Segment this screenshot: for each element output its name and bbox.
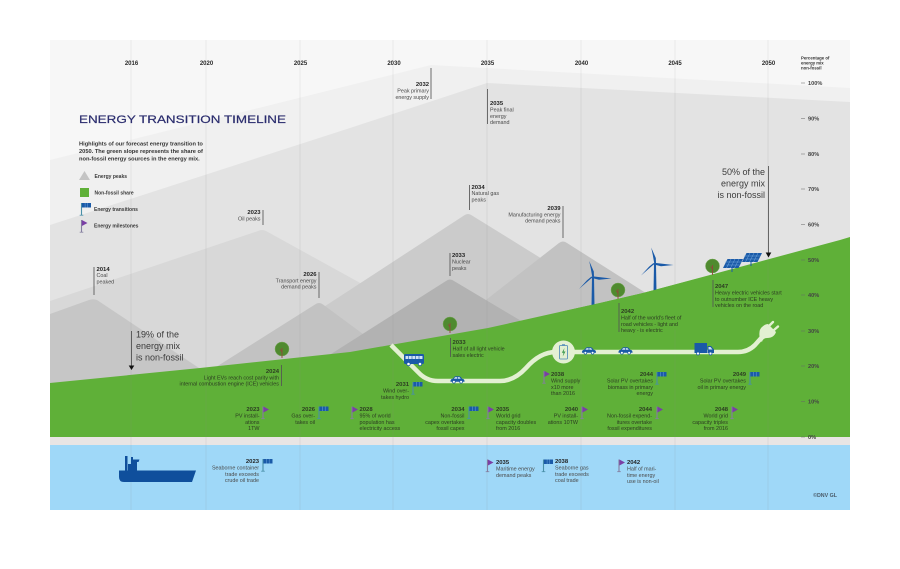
transition: 2034 capex: capex overtakes — [425, 420, 465, 426]
peak label: 2034 gas: Natural gas — [472, 191, 499, 197]
transition: 2049 solar oil: 2049 — [733, 372, 747, 378]
transition: 2026 gas: 2026 — [302, 407, 316, 413]
maritime: 2023 container trade: trade exceeds — [225, 472, 259, 478]
chart background panel — [50, 40, 850, 510]
tree: 2033 — [443, 317, 457, 333]
milestone: 2038 wind supply: 2038 — [551, 372, 565, 378]
milestone: 2038 wind supply: x10 more — [551, 385, 573, 391]
milestone: 2040 PV: PV install- — [554, 414, 578, 420]
year axis labels: 2040 — [575, 61, 589, 67]
peak label: 2039 manufacturing — [508, 206, 563, 238]
year axis labels: 2050 — [762, 61, 776, 67]
peak label: 2026 transport: Transport energy — [276, 278, 317, 284]
peak label: 2032 primary supply: 2032 — [416, 82, 430, 88]
maritime: 2038 gas trade: Seaborne gas — [555, 466, 589, 472]
maritime: 2023 container trade: crude oil trade — [225, 478, 259, 484]
maritime: 2023 container trade — [212, 459, 272, 484]
milestone: 2035 grid: 2035 — [496, 407, 510, 413]
peak label: 2032 primary supply: Peak primary — [397, 88, 429, 94]
icon: bus — [404, 354, 424, 366]
peak label: 2035 final demand: demand — [490, 120, 509, 126]
milestone: 2044 expenditures: fossil expenditures — [607, 426, 652, 432]
milestone: 2028 electricity — [350, 406, 401, 432]
percentage axis: 70% — [808, 187, 819, 193]
transition: 2034 capex — [425, 406, 478, 432]
milestone: 2048 grid: 2048 — [715, 407, 729, 413]
milestone: 2048 grid: capacity triples — [692, 420, 728, 426]
natural gas peak mountain — [230, 214, 660, 400]
percentage axis: non-fossil — [801, 66, 822, 70]
maritime: 2035 demand peaks: 2035 — [496, 460, 510, 466]
maritime: 2023 container trade: Seaborne container — [212, 466, 259, 472]
tree: 2042 — [611, 283, 625, 299]
callout: 50 percent: energy mix — [721, 178, 766, 188]
label: 2024 EV cost parity — [180, 365, 282, 388]
peak label: 2033 nuclear — [450, 253, 471, 276]
transition: 2031 wind: takes hydro — [381, 395, 409, 401]
peak label: 2039 manufacturing: Manufacturing energy — [508, 212, 561, 218]
milestone: 2040 PV — [548, 406, 588, 426]
copyright: ©DNV GL — [813, 492, 838, 499]
year axis labels — [125, 61, 776, 67]
peak label: 2035 final demand: 2035 — [490, 101, 504, 107]
peak label: 2023 oil: Oil peaks — [238, 216, 261, 222]
icon: car 1 — [450, 376, 464, 383]
percentage axis: 100% — [808, 81, 822, 87]
year axis labels: 2030 — [387, 61, 401, 67]
transition: 2049 solar oil: Solar PV overtakes — [700, 378, 746, 384]
transition: 2026 gas — [291, 406, 328, 426]
maritime: 2042 non-oil — [617, 460, 659, 485]
transition: 2044 solar biomass: energy — [637, 391, 653, 397]
intro text: 2050. The green slope represents the share of — [79, 149, 203, 155]
transition: 2044 solar biomass: biomass in primary — [608, 385, 653, 391]
transition: 2044 solar biomass: Solar PV overtakes — [607, 378, 653, 384]
maritime: 2038 gas trade — [542, 459, 589, 484]
maritime band — [50, 445, 850, 510]
oil peak mountain — [50, 230, 420, 400]
peak label: 2023 oil — [238, 210, 263, 225]
label: 2033 half of light vehicles: sales electric — [452, 353, 484, 359]
milestone: 2023 PV: 1TW — [248, 426, 260, 432]
electric road — [391, 336, 763, 381]
icon: wind turbine 1 — [579, 261, 612, 318]
transition: 2034 capex: fossil capex — [436, 426, 465, 432]
maritime: 2035 demand peaks: Maritime energy — [496, 466, 535, 472]
icon: solar panel 1 — [723, 259, 743, 272]
label: 2047 heavy vehicles — [713, 280, 782, 309]
peak label: 2034 gas: 2034 — [472, 185, 485, 191]
milestone: 2023 PV: ations — [245, 420, 260, 426]
percentage axis: 30% — [808, 329, 819, 335]
non-fossil slope overlay hiding turbine bases — [560, 278, 700, 330]
icon: truck — [694, 343, 714, 355]
peak label: 2014 coal — [94, 267, 114, 295]
transition: 2031 wind: Wind over- — [383, 388, 409, 394]
label: 2042 road vehicles: Half of the world's fleet of — [621, 316, 682, 322]
milestone: 2048 grid: World grid — [704, 414, 728, 420]
transport peak mountain — [205, 303, 420, 400]
intro text: Highlights of our forecast energy transition to — [79, 142, 203, 148]
peak label: 2026 transport: 2026 — [303, 272, 317, 278]
callout: 50 percent: is non-fossil — [717, 190, 765, 200]
label: 2042 road vehicles: road vehicles - light and — [621, 322, 678, 328]
peak label: 2033 nuclear: Nuclear — [452, 260, 471, 266]
separator band — [50, 437, 850, 445]
milestone: 2038 wind supply — [542, 371, 581, 397]
maritime: 2038 gas trade: trade exceeds — [555, 472, 589, 478]
label: 2042 road vehicles — [619, 303, 682, 334]
legend: energy peaks: Energy peaks — [94, 174, 127, 180]
label: 2047 heavy vehicles: to outnumber ICE heavy — [715, 297, 773, 303]
peak label: 2039 manufacturing: demand peaks — [525, 219, 561, 225]
milestone: 2023 PV: 2023 — [246, 407, 260, 413]
coal peak mountain — [50, 299, 205, 400]
manufacturing peak mountain — [450, 242, 660, 360]
tree: 2047 — [706, 259, 720, 275]
label: 2024 EV cost parity: internal combustion engine (ICE) vehicles — [180, 382, 279, 388]
milestone: 2023 PV: PV install- — [235, 414, 260, 420]
peak label: 2023 oil: 2023 — [247, 210, 261, 216]
maritime: 2042 non-oil: use is non-oil — [627, 479, 659, 485]
legend: non-fossil share: Non-fossil share — [94, 190, 134, 196]
milestone: 2028 electricity: electricity access — [360, 426, 401, 432]
percentage axis: 80% — [808, 152, 819, 158]
maritime: 2042 non-oil: 2042 — [627, 460, 641, 466]
callout: 19 percent: energy mix — [136, 341, 181, 351]
percentage axis: 10% — [808, 400, 819, 406]
legend: energy milestones: Energy milestones — [94, 224, 139, 230]
milestone: 2044 expenditures: itures overtake — [617, 420, 652, 426]
transition: 2044 solar biomass — [607, 372, 666, 397]
peak label: 2035 final demand: Peak final — [490, 108, 514, 114]
callout: 50 percent — [717, 166, 771, 258]
milestone: 2028 electricity: 2028 — [360, 407, 373, 413]
transition: 2049 solar oil: oil in primary energy — [697, 385, 746, 391]
milestone: 2044 expenditures: 2044 — [639, 407, 653, 413]
milestone: 2048 grid — [692, 406, 738, 432]
milestone: 2035 grid: World grid — [496, 414, 520, 420]
maritime: 2042 non-oil: time energy — [627, 473, 655, 479]
peak label: 2033 nuclear: peaks — [452, 266, 467, 272]
milestone: 2035 grid — [486, 406, 536, 432]
icon: wind turbine 2 — [641, 248, 674, 304]
percentage axis: 20% — [808, 364, 819, 370]
transition: 2026 gas: takes oil — [295, 420, 315, 426]
milestone: 2044 expenditures: Non-fossil expend- — [607, 414, 652, 420]
legend: energy transitions: Energy transitions — [94, 207, 138, 213]
peak label: 2035 final demand: energy — [490, 114, 507, 120]
year axis labels: 2035 — [481, 61, 495, 67]
mountains: energy peaks — [50, 65, 850, 437]
percentage axis: 0% — [808, 435, 816, 441]
peak label: 2026 transport: demand peaks — [281, 285, 317, 291]
transition: 2031 wind — [381, 382, 422, 401]
peak label: 2014 coal: 2014 — [96, 267, 110, 273]
percentage axis: Percentage of — [801, 56, 830, 60]
peak label: 2034 gas — [470, 185, 499, 210]
intro text: non-fossil energy sources in the energy mix. — [79, 156, 200, 162]
nuclear peak mountain — [320, 280, 560, 380]
maritime: 2042 non-oil: Half of mari- — [627, 466, 657, 472]
peak label: 2039 manufacturing: 2039 — [547, 206, 561, 212]
callout: 50 percent: 50% of the — [722, 167, 765, 177]
title: ENERGY TRANSITION TIMELINE — [79, 114, 286, 126]
icon: car 2 — [582, 347, 596, 354]
year axis labels: 2025 — [294, 61, 308, 67]
peak label: 2014 coal: peaked — [96, 279, 114, 285]
transition: 2031 wind: 2031 — [396, 382, 410, 388]
transition: 2044 solar biomass: 2044 — [640, 372, 654, 378]
maritime: 2023 container trade: 2023 — [246, 459, 260, 465]
callout: 19 percent — [129, 330, 184, 370]
label: 2024 EV cost parity: Light EVs reach cost parity with — [204, 375, 279, 381]
label: 2042 road vehicles: 2042 — [621, 309, 635, 315]
peak final energy demand layer — [50, 83, 850, 437]
percentage axis: 40% — [808, 293, 819, 299]
maritime: 2038 gas trade: coal trade — [555, 478, 579, 484]
peak label: 2034 gas: peaks — [472, 197, 486, 203]
percentage axis — [801, 56, 830, 441]
peak label: 2033 nuclear: 2033 — [452, 253, 466, 259]
label: 2033 half of light vehicles — [450, 338, 505, 359]
percentage axis: 50% — [808, 258, 819, 264]
peak label: 2026 transport — [276, 272, 319, 298]
tree: 2024 — [275, 342, 289, 358]
peak label: 2032 primary supply: energy supply — [395, 95, 429, 101]
legend — [79, 171, 139, 232]
callout: 19 percent: is non-fossil — [136, 352, 184, 362]
year axis labels: 2016 — [125, 61, 139, 67]
milestone: 2044 expenditures — [607, 406, 663, 432]
label: 2047 heavy vehicles: 2047 — [715, 284, 729, 290]
intro text — [79, 142, 203, 162]
transition: 2049 solar oil — [697, 372, 760, 391]
year axis labels: 2045 — [668, 61, 682, 67]
callout: 19 percent: 19% of the — [136, 330, 179, 340]
maritime: 2038 gas trade: 2038 — [555, 459, 569, 465]
peak label: 2035 final demand — [488, 89, 514, 126]
label: 2047 heavy vehicles: vehicles on the road — [715, 303, 763, 309]
maritime: 2035 demand peaks: demand peaks — [496, 473, 532, 479]
label: 2042 road vehicles: heavy - is electric — [621, 328, 663, 334]
milestone: 2048 grid: from 2016 — [704, 426, 728, 432]
label: 2024 EV cost parity: 2024 — [266, 369, 280, 375]
icon: solar panel 2 — [742, 253, 762, 266]
label: 2033 half of light vehicles: 2033 — [452, 340, 466, 346]
icon: plug — [759, 322, 778, 342]
milestone: 2035 grid: from 2016 — [496, 426, 520, 432]
milestone: 2038 wind supply: than 2016 — [551, 391, 575, 397]
peak label: 2014 coal: Coal — [96, 273, 108, 279]
transition: 2034 capex: 2034 — [451, 407, 465, 413]
percentage axis: energy mix — [801, 60, 824, 66]
non-fossil share green slope — [50, 237, 850, 437]
percentage axis: 60% — [808, 222, 819, 228]
milestone: 2023 PV — [235, 406, 269, 432]
icon: car 3 — [618, 347, 632, 354]
milestone: 2028 electricity: 95% of world — [360, 414, 391, 420]
icon: container ship — [119, 456, 196, 482]
label: 2047 heavy vehicles: Heavy electric vehicles start — [715, 290, 782, 296]
milestone: 2040 PV: 2040 — [565, 407, 579, 413]
milestone: 2038 wind supply: Wind supply — [551, 378, 581, 384]
peak primary energy supply layer — [50, 65, 850, 437]
milestone: 2028 electricity: population has — [360, 420, 395, 426]
peak label: 2032 primary supply — [395, 68, 431, 101]
maritime: 2035 demand peaks — [486, 460, 535, 479]
milestone: 2040 PV: ations 10TW — [548, 420, 579, 426]
icon: battery charging circle — [552, 340, 575, 364]
milestone: 2035 grid: capacity doubles — [496, 420, 536, 426]
label: 2033 half of light vehicles: Half of all light vehicle — [452, 346, 505, 352]
transition: 2034 capex: Non-fossil — [441, 414, 464, 420]
year axis labels: 2020 — [200, 61, 214, 67]
transition: 2026 gas: Gas over- — [291, 414, 315, 420]
percentage axis: 90% — [808, 116, 819, 122]
